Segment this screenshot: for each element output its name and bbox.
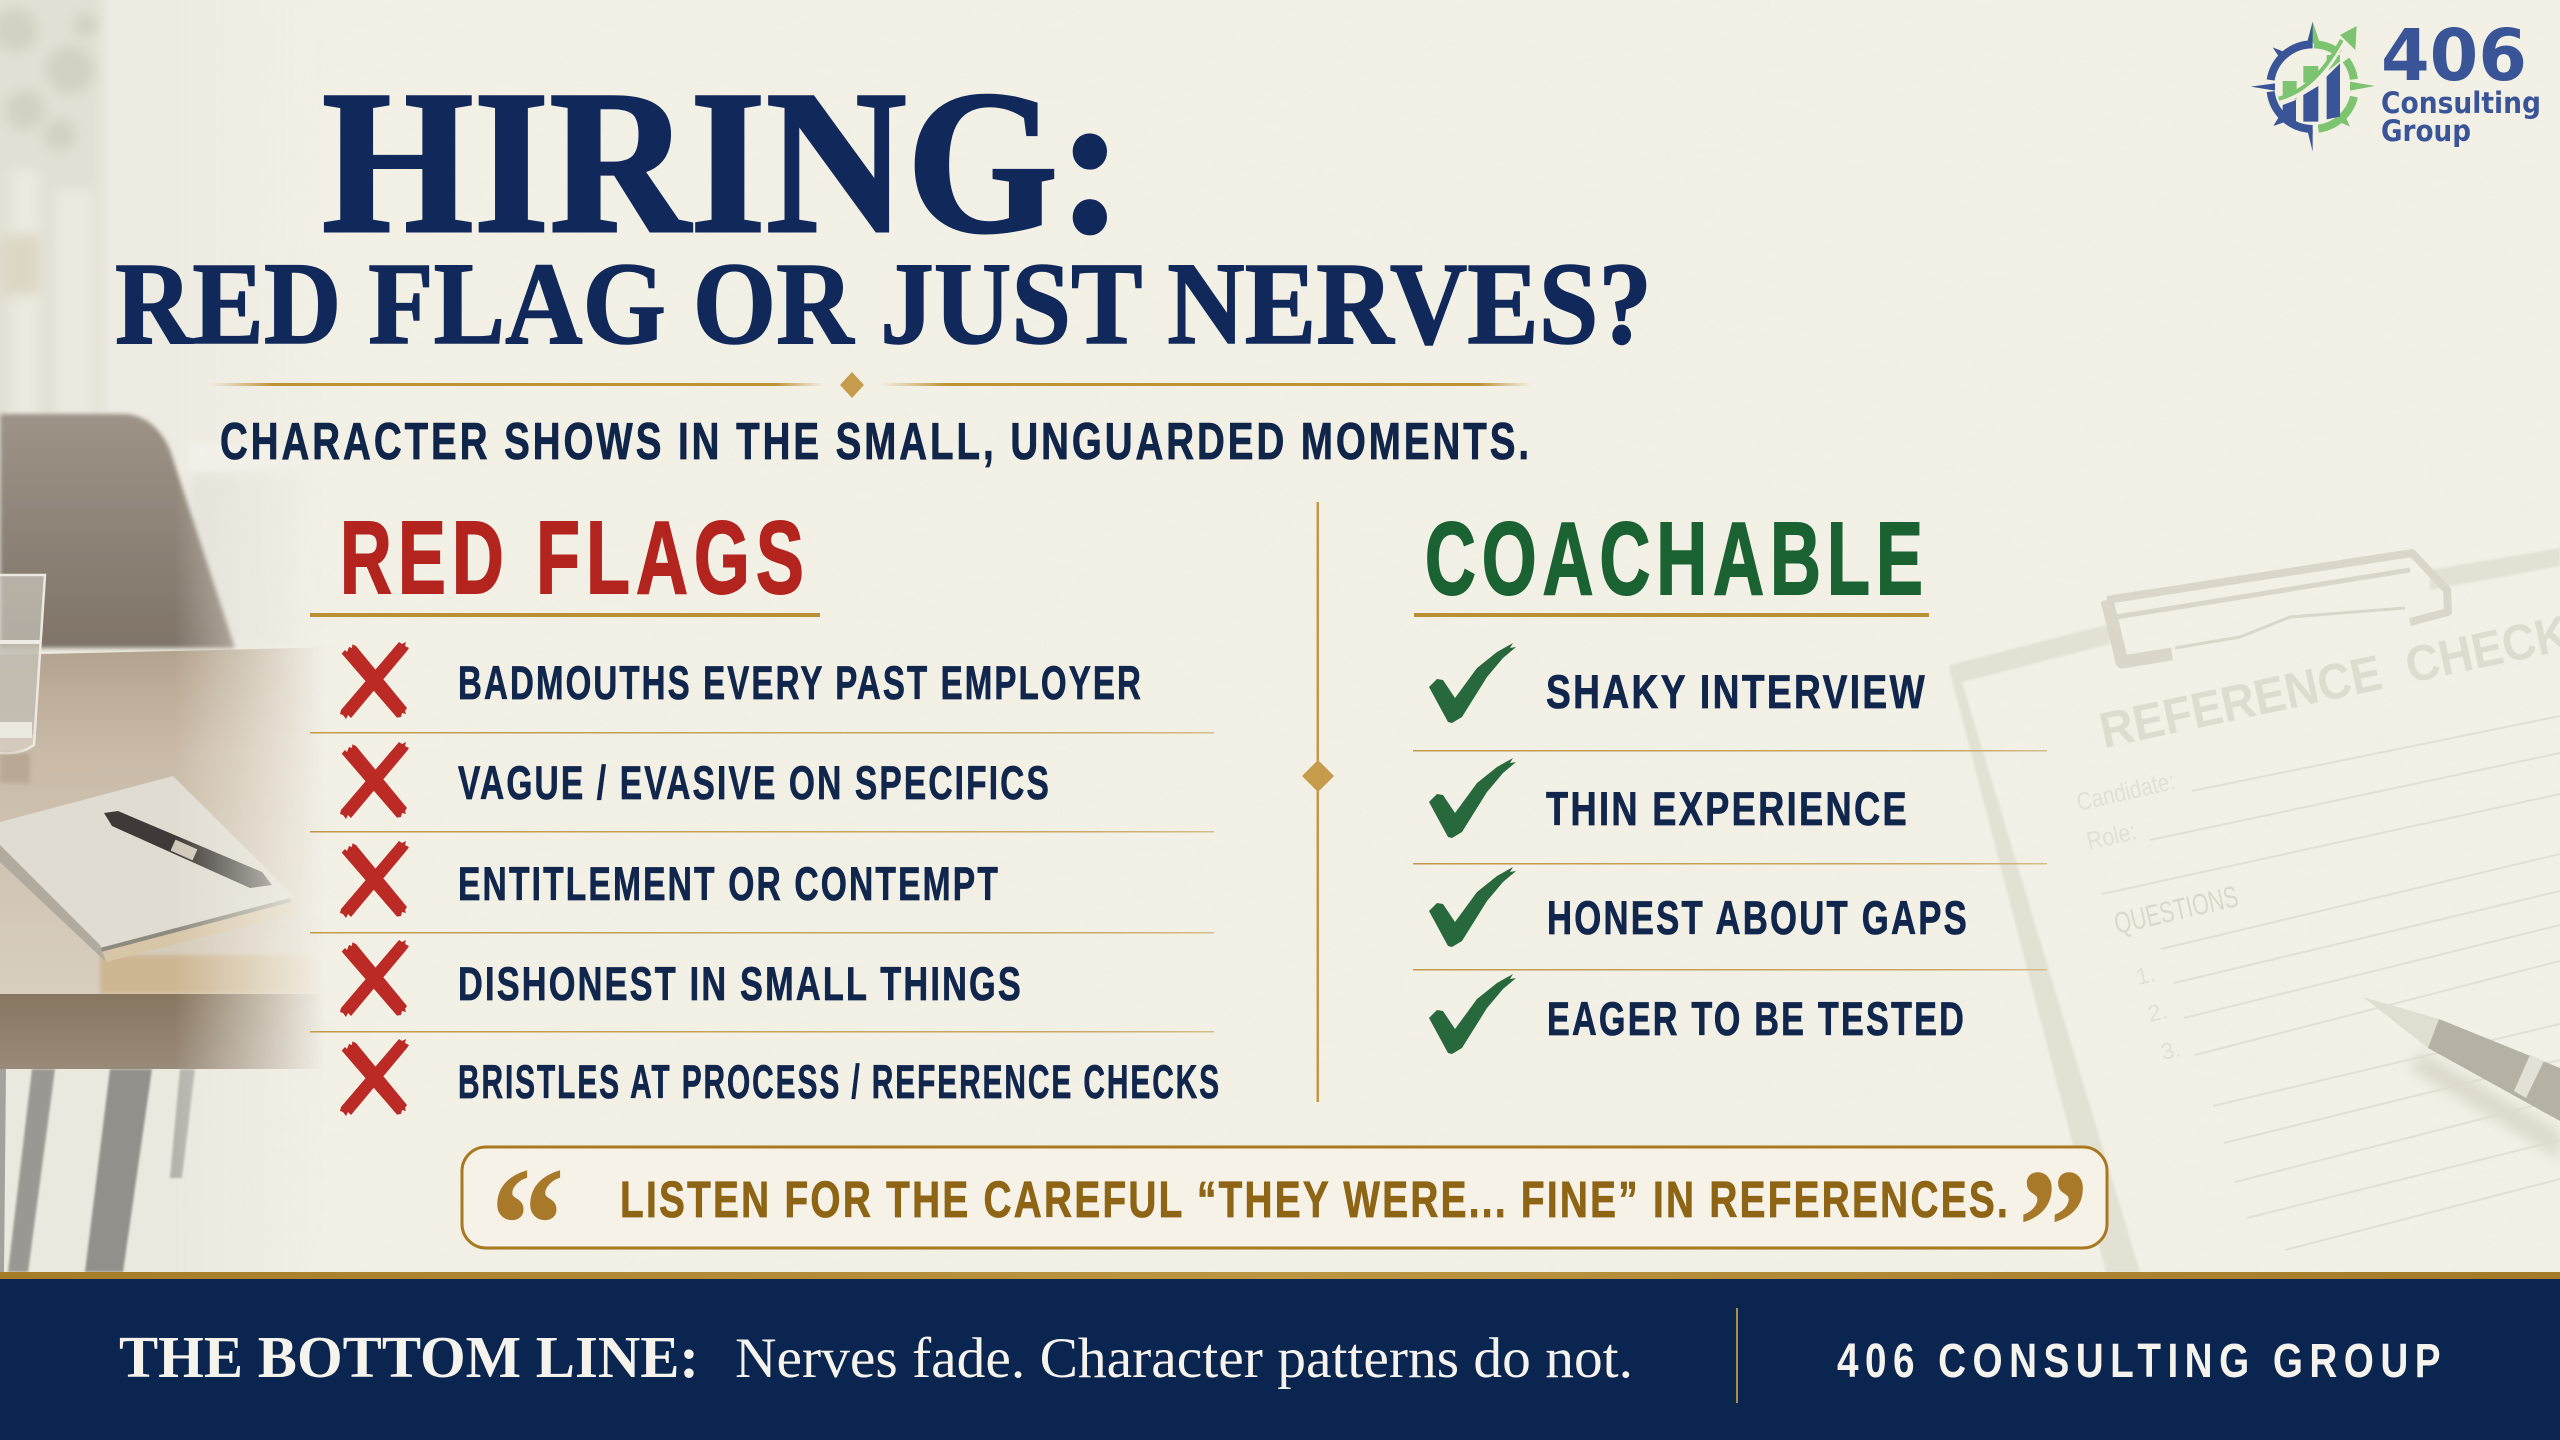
window and wall	[0, 0, 245, 638]
closing quote mark: ”	[2018, 1136, 2089, 1318]
title divider with diamond	[211, 372, 1531, 398]
title: HIRING:	[322, 49, 1123, 276]
coachable row: honest about gaps: HONEST ABOUT GAPS	[1547, 891, 1969, 944]
background photo: desk scene with chair, glass, notebook and pen	[0, 0, 316, 1272]
clipboard metal clip	[2107, 553, 2448, 662]
center divider with diamond	[1302, 502, 1334, 1102]
red flag row: entitlement: ENTITLEMENT OR CONTEMPT	[458, 857, 1000, 910]
form labels: 2.	[2145, 997, 2170, 1027]
tagline: CHARACTER SHOWS IN THE SMALL, UNGUARDED MOMENTS.	[220, 413, 1532, 471]
callout: quote box	[462, 1133, 2107, 1318]
coachable row: thin experience	[1429, 758, 1909, 838]
logo compass mark	[2251, 22, 2375, 152]
callout text: LISTEN FOR THE CAREFUL “THEY WERE... FINE” IN REFERENCES.	[620, 1171, 2010, 1228]
coachable row: honest about gaps	[1429, 867, 1969, 947]
logo wordmark	[2381, 14, 2541, 148]
red flag row: bristles	[340, 1039, 1221, 1116]
form labels: 3.	[2158, 1035, 2183, 1065]
chair back	[0, 414, 235, 648]
logo wordmark: Consulting	[2381, 86, 2541, 120]
clipboard edge	[1950, 548, 2560, 1272]
coachable row: shaky interview	[1429, 643, 1927, 723]
panel: red flags	[310, 500, 1221, 1116]
notebook	[0, 776, 295, 962]
bottom line text: THE BOTTOM LINE:	[119, 1324, 699, 1390]
red flag row: vague: VAGUE / EVASIVE ON SPECIFICS	[458, 756, 1051, 809]
opening quote mark: “	[490, 1133, 565, 1317]
form labels: Candidate:	[2074, 767, 2178, 817]
footer band	[0, 1272, 2560, 1440]
coachable row: eager to be tested	[1429, 974, 1966, 1054]
pen on clipboard	[2363, 997, 2560, 1160]
water glass	[0, 575, 45, 783]
logo: 406 Consulting Group	[2251, 14, 2541, 152]
panel: coachable	[1413, 501, 2047, 1054]
red flags heading: RED FLAGS	[340, 500, 810, 615]
background clipboard watermark	[1950, 548, 2560, 1272]
red flag row: badmouths	[340, 642, 1143, 719]
red flag row: badmouths: BADMOUTHS EVERY PAST EMPLOYER	[458, 656, 1143, 709]
red flag row: bristles: BRISTLES AT PROCESS / REFERENCE CHECKS	[458, 1055, 1221, 1108]
pen	[104, 811, 272, 888]
coachable row: shaky interview: SHAKY INTERVIEW	[1546, 665, 1927, 718]
red flag row: dishonest	[340, 940, 1023, 1017]
form labels: 1.	[2133, 960, 2158, 990]
form labels: Role:	[2084, 817, 2139, 856]
logo wordmark: Group	[2381, 114, 2471, 148]
form ruled lines	[2102, 716, 2560, 1250]
bottom line text: Nerves fade. Character patterns do not.	[735, 1327, 1633, 1390]
red flag row: entitlement	[340, 841, 1000, 918]
coachable row: thin experience: THIN EXPERIENCE	[1546, 782, 1909, 835]
coachable heading: COACHABLE	[1425, 501, 1929, 616]
table	[0, 648, 316, 1069]
form labels: QUESTIONS	[2111, 880, 2241, 941]
coachable row: eager to be tested: EAGER TO BE TESTED	[1547, 992, 1966, 1045]
title: RED FLAG OR JUST NERVES?	[115, 238, 1652, 369]
form labels	[2074, 767, 2241, 1065]
floor and table legs	[0, 1069, 196, 1272]
title	[115, 49, 1652, 369]
bottom line text	[119, 1324, 1633, 1390]
logo wordmark: 406	[2381, 14, 2527, 97]
red flag row: dishonest: DISHONEST IN SMALL THINGS	[458, 957, 1023, 1010]
red flag row: vague	[340, 742, 1051, 819]
